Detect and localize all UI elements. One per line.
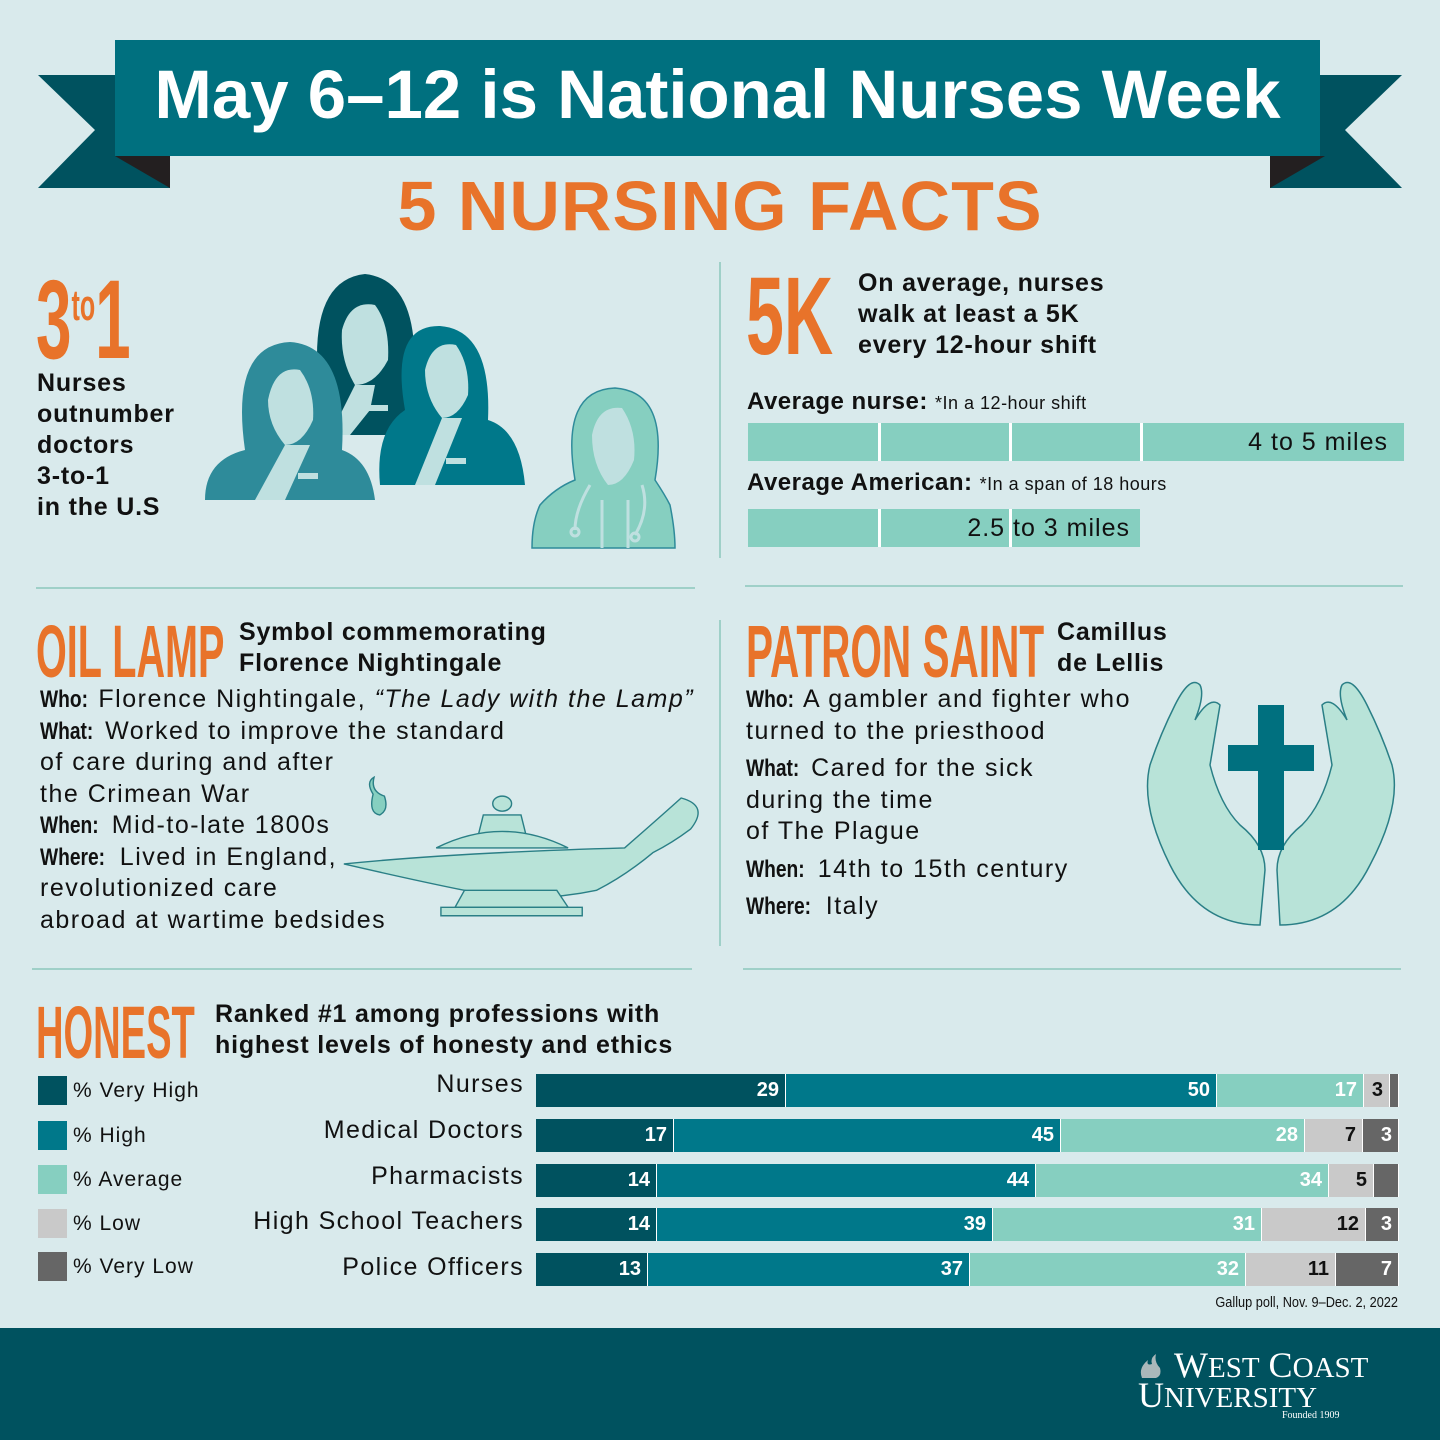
legend: % Very High bbox=[73, 1079, 200, 1102]
text: lamp details: Worked to improve the standard bbox=[105, 716, 505, 744]
text: lamp details: What: bbox=[40, 718, 93, 744]
text: lamp details bbox=[40, 685, 694, 934]
subheading: highest levels of honesty and ethics bbox=[215, 1031, 673, 1059]
text: saint details: Cared for the sick bbox=[811, 754, 1034, 782]
footer bbox=[0, 1328, 1440, 1440]
text: saint details: A gambler and fighter who bbox=[803, 685, 1131, 713]
heading: oil lamp: OIL LAMP bbox=[36, 610, 224, 693]
text: lamp details: revolutionized care bbox=[40, 874, 278, 902]
stacked bar chart: 11 bbox=[1308, 1258, 1329, 1280]
stacked bar chart: 17 bbox=[645, 1124, 667, 1146]
text: saint details: of The Plague bbox=[746, 817, 921, 845]
heading: honest: HONEST bbox=[36, 991, 195, 1074]
stacked bar chart: 31 bbox=[1233, 1213, 1255, 1235]
chart labels: Medical Doctors bbox=[324, 1116, 524, 1144]
chart labels: High School Teachers bbox=[253, 1207, 524, 1235]
text: saint details: turned to the priesthood bbox=[746, 716, 1046, 744]
text: lamp details: Lived in England, bbox=[120, 842, 337, 870]
logo: west coast university: Founded 1909 bbox=[1282, 1410, 1340, 1421]
stacked bar chart: 7 bbox=[1381, 1258, 1392, 1280]
heading: patron saint: PATRON SAINT bbox=[746, 610, 1044, 693]
subtitle: 5 NURSING FACTS bbox=[397, 167, 1043, 245]
stacked bar chart: 28 bbox=[1276, 1124, 1298, 1146]
text: walk 5K: every 12-hour shift bbox=[858, 331, 1097, 359]
panel: oil lamp bbox=[36, 610, 699, 934]
stacked bar chart: 39 bbox=[964, 1213, 986, 1235]
chart labels bbox=[253, 1070, 524, 1281]
text: nurses outnumber: Nurses outnumber doctors bbox=[37, 369, 175, 459]
chart labels: Pharmacists bbox=[371, 1162, 524, 1190]
subheading: Florence Nightingale bbox=[239, 649, 502, 677]
stacked bar chart: 3 bbox=[1372, 1079, 1383, 1101]
text: saint details: Italy bbox=[826, 892, 879, 920]
header ribbon bbox=[38, 40, 1402, 188]
text: saint details: 14th to 15th century bbox=[818, 854, 1069, 882]
stacked bar chart: 32 bbox=[1217, 1258, 1239, 1280]
icon: lamp bbox=[344, 776, 699, 916]
panel: patron saint bbox=[746, 610, 1396, 926]
subheading: Camillus bbox=[1057, 618, 1168, 646]
stacked bar chart: 50 bbox=[1188, 1079, 1210, 1101]
chart labels: Police Officers bbox=[342, 1253, 524, 1281]
logo: west coast university bbox=[1138, 1345, 1368, 1421]
text: lamp details: When: bbox=[40, 812, 99, 839]
legend: % High bbox=[73, 1124, 147, 1147]
text: saint details bbox=[746, 685, 1131, 920]
stat 3 to 1: 3to1 bbox=[36, 257, 131, 382]
stacked bar chart: 3 bbox=[1381, 1124, 1392, 1146]
text: saint details: Where: bbox=[746, 893, 811, 920]
label: average nurse: Average nurse: *In a 12-hour shift bbox=[747, 388, 1087, 415]
text: saint details: Who: bbox=[746, 686, 794, 713]
text: saint details: What: bbox=[746, 755, 799, 782]
stacked bar chart: 17 bbox=[1335, 1079, 1357, 1101]
bar: american miles bbox=[748, 509, 1140, 547]
bar: nurse miles: 4 to 5 miles bbox=[1248, 428, 1388, 456]
stacked bar chart: 12 bbox=[1337, 1213, 1359, 1235]
panel: 5K walking bbox=[746, 255, 1404, 547]
panel: 3 to 1 bbox=[36, 257, 676, 549]
stacked bar chart bbox=[536, 1074, 1399, 1286]
text: lamp details: Where: bbox=[40, 844, 105, 870]
subheading bbox=[215, 1000, 673, 1059]
text: lamp details: abroad at wartime bedsides bbox=[40, 906, 386, 934]
legend: % Low bbox=[73, 1212, 141, 1235]
text: lamp details: Mid-to-late 1800s bbox=[112, 811, 330, 839]
stacked bar chart: 45 bbox=[1032, 1124, 1054, 1146]
subheading: Symbol commemorating bbox=[239, 618, 547, 646]
stat 5K: 5K bbox=[746, 255, 833, 378]
text: lamp details: Who: bbox=[40, 686, 88, 713]
text: lamp details: of care during and after bbox=[40, 748, 334, 776]
stacked bar chart: 37 bbox=[941, 1258, 963, 1280]
stacked bar chart: 44 bbox=[1007, 1169, 1029, 1191]
stacked bar chart: 13 bbox=[619, 1258, 641, 1280]
subheading bbox=[239, 618, 547, 677]
stacked bar chart: 34 bbox=[1300, 1169, 1322, 1191]
source note: Gallup poll, Nov. 9–Dec. 2, 2022 bbox=[1215, 1294, 1398, 1311]
text: lamp details: the Crimean War bbox=[40, 780, 251, 808]
text: nurses outnumber: 3-to-1 bbox=[37, 462, 110, 490]
legend: % Average bbox=[73, 1168, 183, 1191]
text: walk 5K: walk at least a 5K bbox=[858, 300, 1079, 328]
icon: three nurses and doctor bbox=[205, 274, 676, 549]
panel: honest heading bbox=[36, 991, 673, 1074]
stacked bar chart: 3 bbox=[1381, 1213, 1392, 1235]
title: May 6–12 is National Nurses Week bbox=[154, 56, 1281, 133]
chart labels: Nurses bbox=[436, 1070, 524, 1098]
text: nurses outnumber bbox=[37, 369, 175, 521]
stacked bar chart: 5 bbox=[1356, 1169, 1367, 1191]
text: lamp details: Florence Nightingale, “The Lady with the Lamp” bbox=[98, 685, 694, 713]
logo: west coast university: UNIVERSITY bbox=[1138, 1375, 1317, 1415]
text: saint details: during the time bbox=[746, 786, 934, 814]
bar: american miles: 2.5 to 3 miles bbox=[967, 514, 1130, 542]
subheading bbox=[1057, 618, 1168, 677]
text: walk 5K: On average, nurses bbox=[858, 269, 1104, 297]
bar: nurse miles bbox=[748, 423, 1404, 461]
label: average american: Average American: *In a span of 18 hours bbox=[747, 469, 1167, 496]
icon: flame bbox=[1140, 1354, 1160, 1378]
text: walk 5K bbox=[858, 269, 1104, 359]
text: nurses outnumber: in the U.S bbox=[37, 493, 160, 521]
stacked bar chart: 29 bbox=[757, 1079, 779, 1101]
stacked bar chart: 14 bbox=[628, 1169, 650, 1191]
legend bbox=[38, 1076, 200, 1281]
text: saint details: When: bbox=[746, 856, 805, 882]
logo: west coast university: WEST COAST bbox=[1174, 1345, 1368, 1385]
subheading: Ranked #1 among professions with bbox=[215, 1000, 660, 1028]
stacked bar chart: 14 bbox=[628, 1213, 650, 1235]
icon: hands with cross bbox=[1146, 682, 1396, 926]
subheading: de Lellis bbox=[1057, 649, 1164, 677]
legend: % Very Low bbox=[73, 1255, 194, 1278]
stacked bar chart: 7 bbox=[1345, 1124, 1356, 1146]
